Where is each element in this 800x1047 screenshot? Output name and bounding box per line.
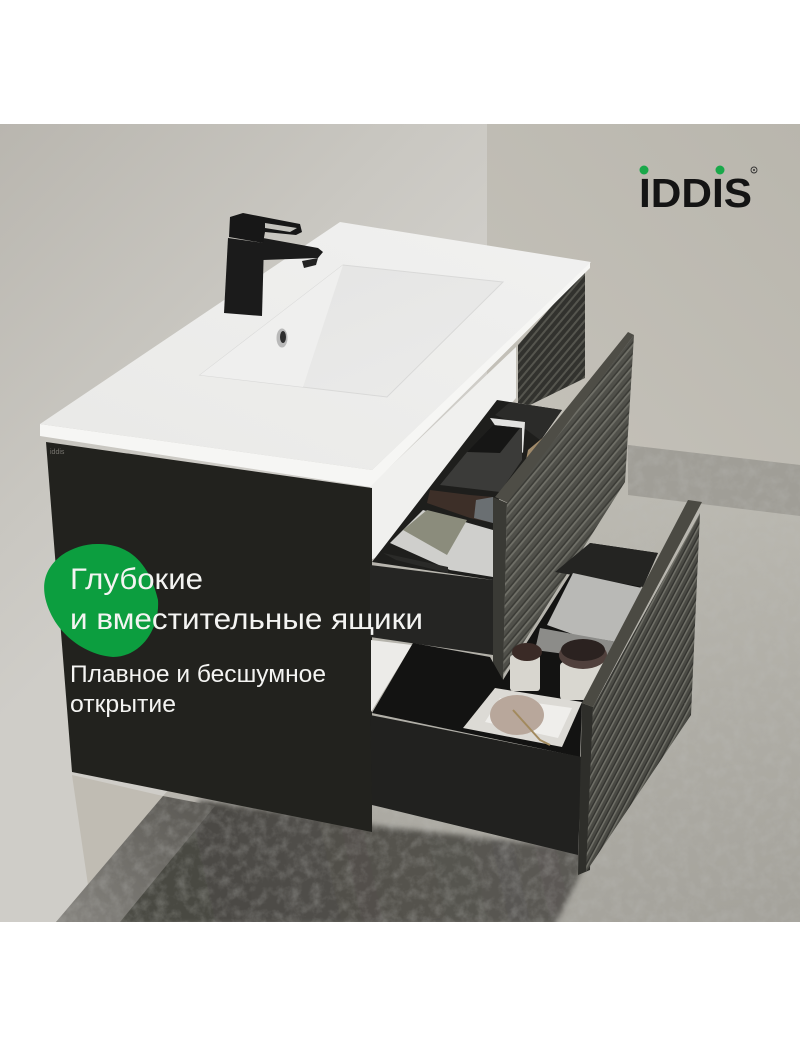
- logo: iddis: IDDIS: [639, 170, 752, 216]
- cabinet body: [46, 442, 372, 832]
- subheading: [70, 661, 326, 718]
- heading: Глубокие: [70, 563, 203, 596]
- heading: и вместительные ящики: [70, 603, 423, 636]
- green blob accent: [44, 544, 158, 657]
- soap dish with stone: [463, 688, 582, 747]
- white panel gap: [371, 640, 412, 712]
- lower drawer interior: [372, 543, 658, 757]
- small logo on cabinet: iddis: [50, 449, 65, 456]
- upper drawer front: [493, 332, 634, 687]
- upper drawer interior: [372, 400, 562, 580]
- photo background: room: [0, 124, 800, 942]
- subheading: Плавное и бесшумное: [70, 661, 326, 688]
- faucet: [224, 213, 323, 316]
- back ribbed cabinet section: [518, 268, 585, 405]
- lower drawer front: [578, 500, 702, 875]
- countertop and washbasin: [40, 222, 591, 487]
- lower drawer side: [370, 715, 582, 855]
- jars: [510, 639, 607, 700]
- subheading: открытие: [70, 691, 176, 718]
- upper drawer side: [370, 565, 493, 655]
- heading: [70, 563, 423, 636]
- white side panel: [370, 347, 516, 560]
